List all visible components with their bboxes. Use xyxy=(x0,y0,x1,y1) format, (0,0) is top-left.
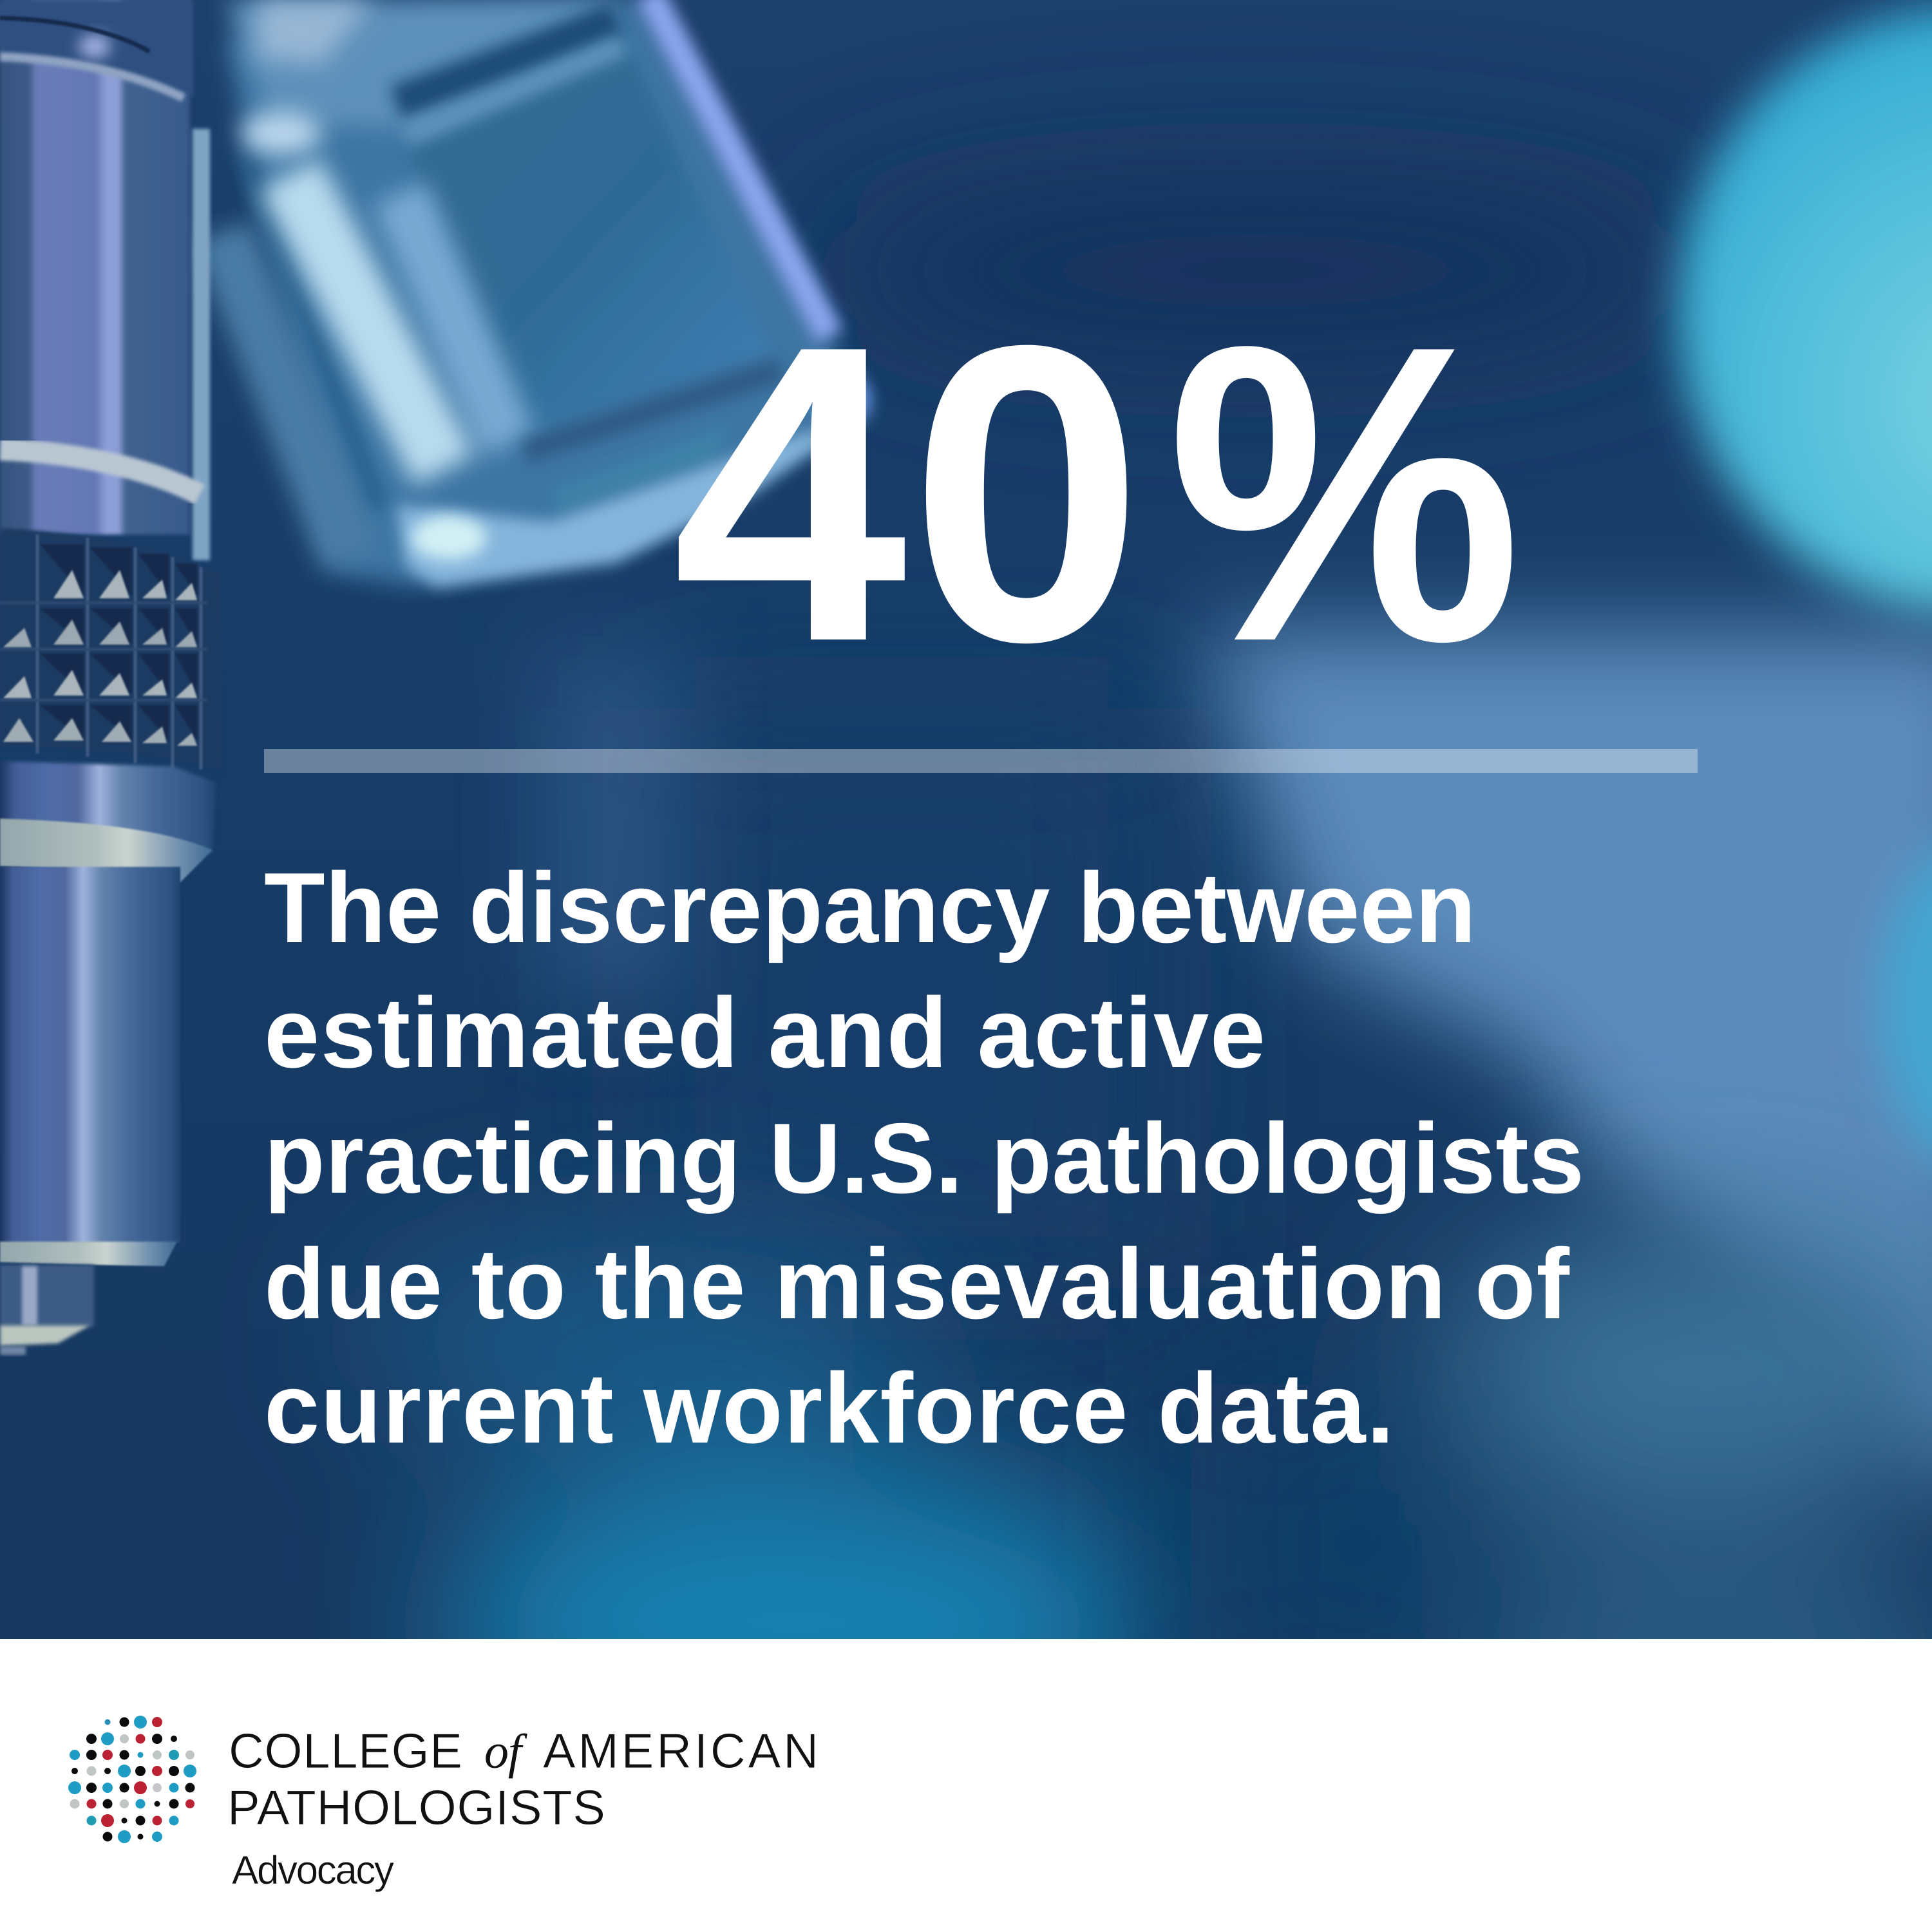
big number: 40%: 0 xyxy=(909,258,1144,729)
big number: 40% xyxy=(672,258,1522,730)
thin light rod xyxy=(193,129,210,560)
lower barrel xyxy=(0,867,180,1243)
statement text: estimated and active xyxy=(264,977,1265,1088)
logo: dot mark xyxy=(68,1716,196,1843)
blurred objective lens xyxy=(222,0,870,587)
lower silver band xyxy=(0,1242,177,1266)
base xyxy=(0,1265,94,1327)
silver band xyxy=(0,819,213,882)
light blurred blue shape on right xyxy=(1202,631,1932,1504)
big number: 40%: % xyxy=(1167,259,1522,730)
logo: wordmark: COLLEGE xyxy=(229,1724,462,1779)
logo: wordmark: AMERICAN xyxy=(543,1724,819,1779)
teal glow at bottom xyxy=(349,1190,1200,1639)
logo: wordmark: PATHOLOGISTS xyxy=(227,1781,605,1835)
collar xyxy=(0,761,216,853)
statement text xyxy=(264,852,1584,1464)
dark haze xyxy=(918,184,1656,708)
big number: 40%: 4 xyxy=(672,258,909,729)
statement text: practicing U.S. pathologists xyxy=(264,1103,1584,1214)
statement text: The discrepancy between xyxy=(264,852,1476,963)
statement text: due to the misevaluation of xyxy=(264,1228,1569,1340)
microscope metal column xyxy=(0,0,222,1355)
cyan blurred circle, top right xyxy=(1678,6,1932,612)
logo: wordmark: of xyxy=(484,1725,527,1779)
logo: wordmark xyxy=(227,1724,819,1835)
logo: Advocacy label: Advocacy xyxy=(232,1848,394,1893)
footer panel xyxy=(0,1639,1932,1932)
soft vertical band xyxy=(535,644,689,1005)
upper barrel xyxy=(0,0,191,535)
divider rule xyxy=(264,749,1698,773)
knurled ring xyxy=(0,528,222,770)
white ring xyxy=(0,450,200,495)
statement text: current workforce data. xyxy=(264,1352,1394,1464)
cyan blurred circle, lower right xyxy=(1880,831,1932,1179)
